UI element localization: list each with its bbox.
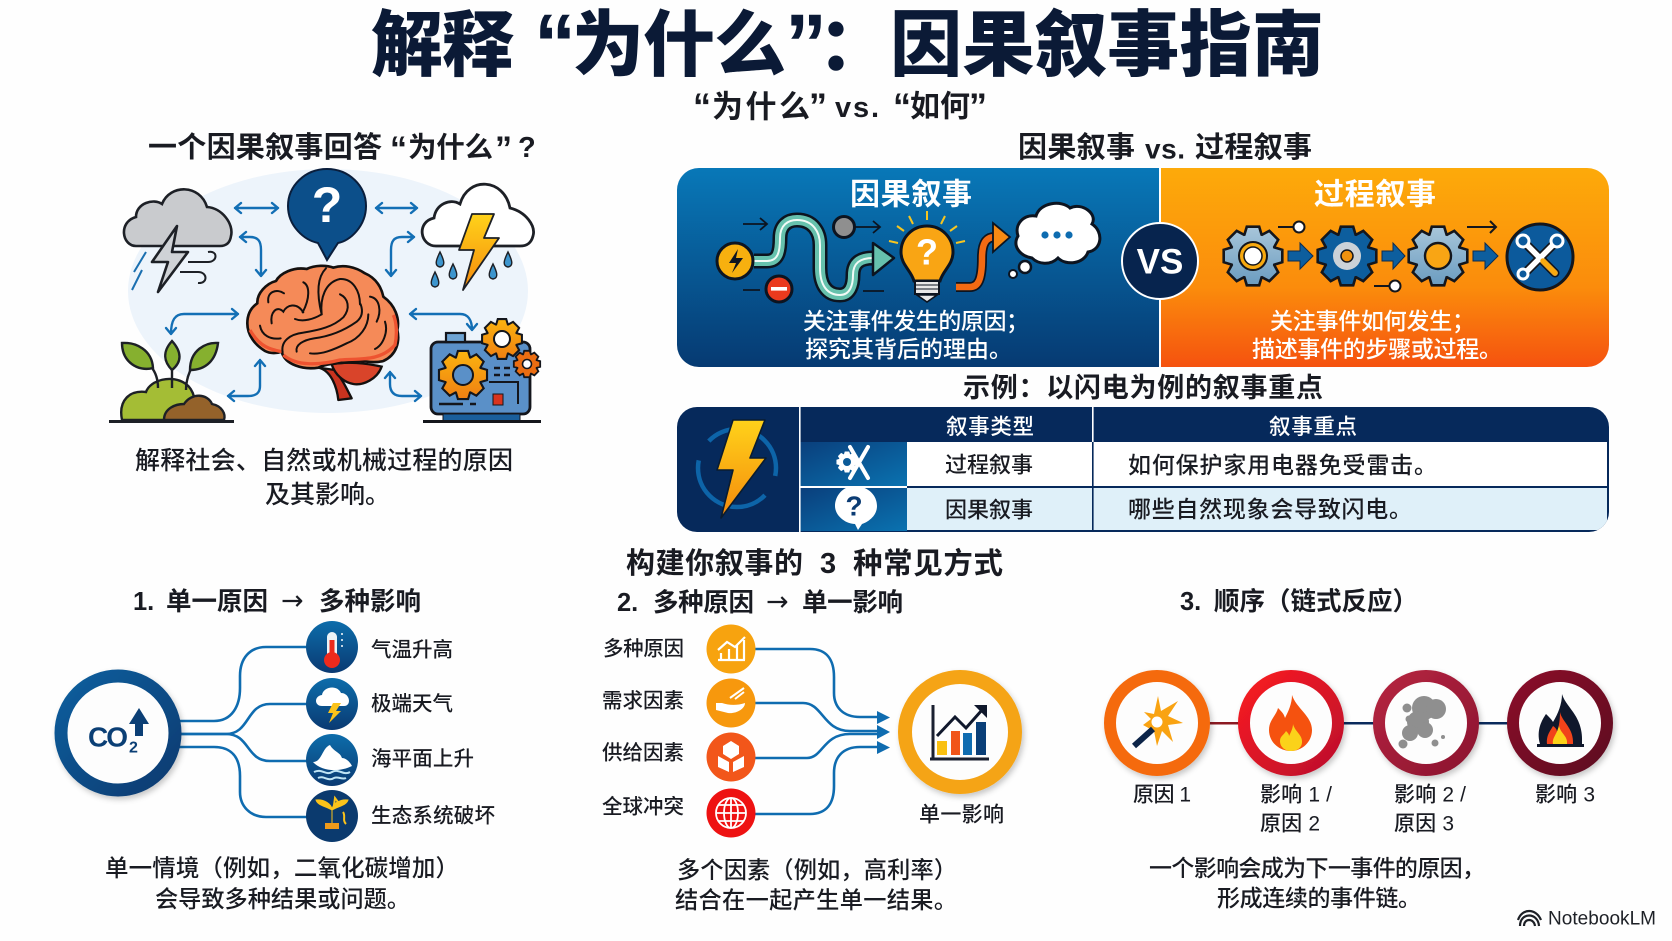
heading: causal narrative answers why: “: [390, 130, 407, 168]
caption: 形成连续的事件链。: [1217, 885, 1421, 911]
caption: 结合在一起产生单一结果。: [675, 887, 957, 913]
icon: orange arrow: [956, 237, 1000, 287]
subtitle: 如何: [910, 90, 970, 124]
label: [1260, 784, 1332, 836]
side: process narrative: 过程叙事: [1314, 178, 1436, 212]
icon: spark: [1110, 676, 1204, 770]
icon: chart: [706, 624, 756, 674]
heading: causal narrative answers why: ”: [495, 130, 512, 168]
icon: question bubble: [288, 169, 366, 260]
arrows linking brain with scenes: [166, 203, 477, 401]
icon: globe: [706, 788, 756, 838]
subtitle: “: [693, 86, 711, 126]
icon: CO2 circle: CO: [88, 722, 128, 752]
label: 生态系统破坏: [371, 804, 496, 828]
subtitle: “: [893, 86, 911, 126]
icon: rain cloud with yellow bolt: [422, 184, 534, 290]
label: 原因 3: [1394, 812, 1454, 836]
side: causal narrative: [717, 178, 1100, 362]
heading 1: →: [281, 586, 304, 616]
icon: question cell: ?: [845, 490, 863, 522]
icon: orange arrow inner: [956, 237, 1000, 287]
heading 2: 多种原因: [653, 589, 754, 617]
label: 单一影响: [919, 804, 1004, 826]
icon: winding path to lightbulb: [717, 216, 894, 302]
icon: question cell: [835, 486, 877, 530]
icon: tools cell: [836, 447, 868, 478]
heading 1: 多种影响: [319, 588, 421, 616]
row: causal narrative: 哪些自然现象会导致闪电。: [1128, 496, 1412, 522]
icon: lightning with cycle arrows: [698, 420, 776, 518]
icon: demand hand: [706, 678, 756, 728]
row: process narrative: [945, 452, 1437, 478]
icon: thought cloud: [1009, 203, 1100, 278]
connector lines: [1205, 722, 1515, 724]
heading 1: 单一原因: [166, 588, 268, 616]
icon: flame: [1244, 676, 1338, 770]
subtitle: ”: [809, 86, 827, 126]
heading: causal vs process: 因果叙事: [1018, 131, 1135, 164]
label: 供给因素: [602, 742, 684, 764]
row: causal narrative: [945, 496, 1412, 522]
text: process focus: [1252, 308, 1502, 362]
row: causal narrative: 因果叙事: [945, 498, 1033, 522]
text: process focus: 关注事件如何发生；: [1270, 308, 1475, 334]
icon: smoke: [1379, 676, 1473, 770]
VS badge: [1122, 223, 1198, 299]
heading 1: 1.: [133, 588, 154, 616]
title: [371, 0, 1324, 91]
heading 2: 单一影响: [802, 589, 903, 617]
header row: [946, 415, 1357, 439]
text: causal focus: [803, 308, 1029, 362]
title: 为什么: [572, 6, 786, 86]
row: process narrative: 过程叙事: [945, 452, 1033, 478]
footer: NotebookLM logo: NotebookLM: [1548, 908, 1656, 930]
label: 原因 2: [1260, 812, 1320, 836]
caption: 一个影响会成为下一事件的原因，: [1149, 855, 1485, 881]
icon: thermometer: [306, 621, 358, 673]
connector lines: [755, 649, 890, 814]
panel: many causes single effect: [602, 586, 1015, 913]
icon: arrow head: [993, 223, 1010, 252]
heading: causal narrative answers why: 为什么: [408, 132, 493, 164]
heading 2: →: [766, 586, 789, 618]
icon: sea level: [306, 734, 358, 786]
label: [1394, 784, 1466, 836]
icon: big fire: [1513, 676, 1607, 770]
panel: single cause many effects: [61, 586, 496, 912]
icon: storm cloud with grey bolt: [124, 189, 231, 292]
text: causal focus: 关注事件发生的原因；: [803, 308, 1029, 334]
header row: 叙事类型: [946, 415, 1034, 439]
caption: [135, 447, 513, 509]
icon: single effect circle: [905, 677, 1015, 787]
text: causal focus: 探究其背后的理由。: [805, 336, 1012, 362]
panel: chain reaction: [1110, 587, 1607, 911]
backdrop blob: [128, 169, 528, 413]
label: 极端天气: [371, 692, 453, 716]
icon: brain: [247, 266, 398, 400]
heading: three common approaches: 种常见方式: [853, 548, 1003, 580]
heading 3: 3.: [1180, 588, 1201, 616]
icon: gears sequence: [1224, 221, 1498, 292]
caption: [1149, 855, 1485, 911]
caption: [675, 857, 957, 913]
panel: what a causal narrative answers: [109, 130, 541, 509]
caption: [105, 855, 459, 912]
heading 1: [133, 586, 421, 616]
caption: 多个因素（例如，高利率）: [677, 857, 957, 883]
icon: supply boxes: [706, 732, 756, 782]
label: 多种原因: [603, 638, 684, 660]
heading: three common approaches: 3: [820, 548, 836, 580]
caption: 单一情境（例如，二氧化碳增加）: [105, 855, 459, 881]
table: lightning narrative focus: [677, 407, 1609, 532]
icon: extreme weather: [306, 678, 358, 730]
icon: ecosystem damage: [306, 790, 358, 842]
subtitle: ”: [969, 86, 987, 126]
panel: comparison causal vs process: [677, 168, 1609, 367]
heading 2: 2.: [617, 589, 638, 617]
subtitle: 为什么: [712, 90, 810, 124]
heading 2: [617, 586, 903, 618]
heading: causal vs process: vs.: [1145, 134, 1185, 164]
caption: 及其影响。: [265, 481, 390, 509]
icon: tools: [1507, 224, 1573, 290]
title: ：: [818, 6, 890, 86]
label: 全球冲突: [602, 796, 684, 818]
label: 影响 3: [1535, 784, 1595, 806]
title: 解释: [371, 6, 514, 86]
label: 气温升高: [371, 638, 453, 662]
label: 海平面上升: [371, 748, 474, 770]
connector lines: [178, 647, 308, 817]
icon: plants and soil: [109, 341, 234, 423]
heading: causal vs process: [1018, 131, 1312, 164]
icon: question bubble: ?: [312, 177, 342, 233]
heading: causal narrative answers why: [148, 130, 536, 168]
VS badge: VS: [1137, 242, 1183, 282]
subtitle: [693, 86, 987, 126]
heading: causal narrative answers why: 一个因果叙事回答: [148, 131, 382, 164]
icon: lightbulb with question mark: [889, 211, 965, 302]
heading: three common approaches: 构建你叙事的: [626, 547, 803, 580]
icon: CO2 circle: 2: [129, 740, 138, 756]
side: process narrative: [1224, 178, 1573, 362]
heading 3: 顺序（链式反应）: [1214, 587, 1418, 616]
heading: causal narrative answers why: ?: [518, 132, 536, 164]
caption: 会导致多种结果或问题。: [155, 886, 410, 912]
subtitle: vs.: [835, 92, 879, 124]
label: 影响 2 /: [1394, 784, 1466, 806]
row: process narrative: 如何保护家用电器免受雷击。: [1128, 452, 1437, 478]
title: 因果叙事指南: [890, 6, 1324, 86]
label: 需求因素: [602, 690, 684, 712]
caption: 解释社会、自然或机械过程的原因: [135, 447, 513, 475]
heading: causal vs process: 过程叙事: [1195, 131, 1312, 164]
icon: lightbulb with question mark: ?: [916, 232, 938, 272]
side: causal narrative: 因果叙事: [850, 178, 972, 212]
label: 影响 1 /: [1260, 784, 1332, 806]
icon: CO2 circle: [61, 676, 175, 790]
text: process focus: 描述事件的步骤或过程。: [1252, 336, 1502, 362]
header row: 叙事重点: [1269, 415, 1357, 439]
heading: three common approaches: [626, 547, 1003, 580]
icon: machine with gears: [423, 319, 541, 423]
heading: lightning example: 示例：以闪电为例的叙事重点: [963, 373, 1323, 403]
label: 原因 1: [1133, 784, 1191, 806]
